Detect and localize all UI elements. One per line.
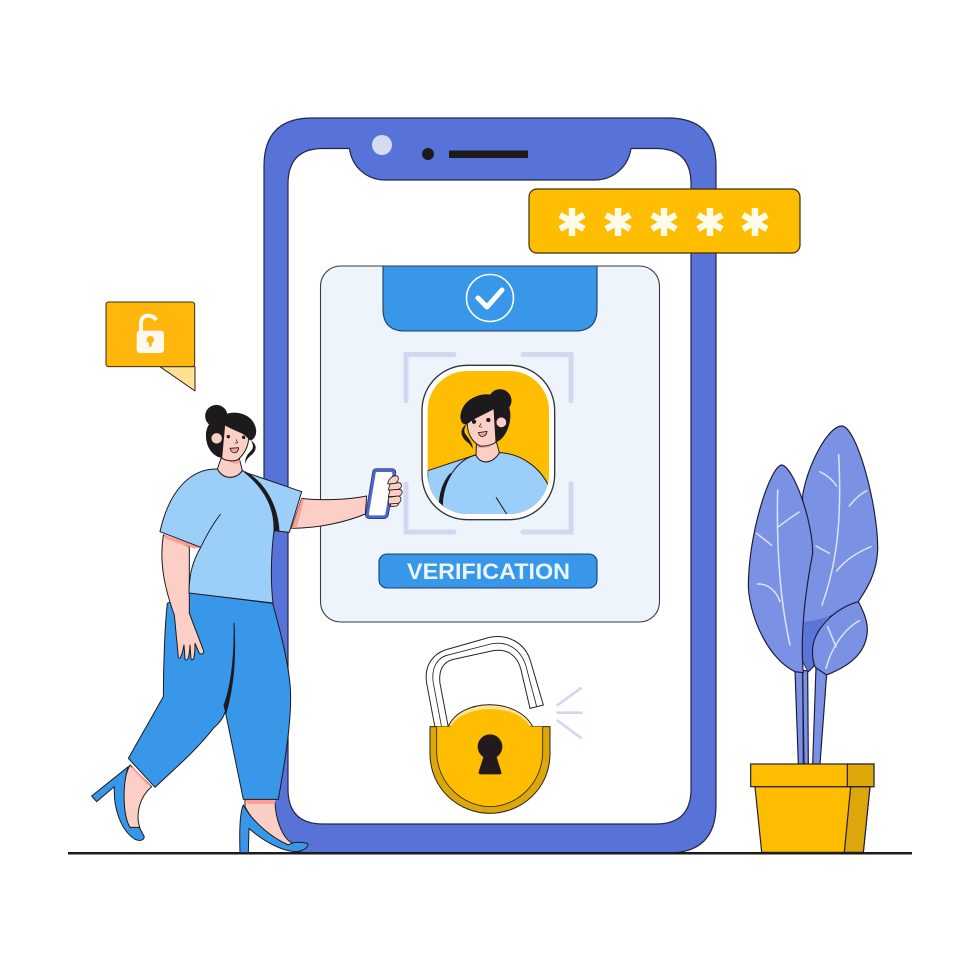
woman upper body bbox=[160, 405, 402, 603]
pot bbox=[751, 764, 874, 852]
portrait frame bbox=[422, 365, 555, 520]
nose bbox=[235, 439, 238, 443]
strap shadow bbox=[245, 472, 279, 531]
verification button: VERIFICATION bbox=[407, 559, 570, 584]
open padlock bbox=[426, 637, 581, 813]
neck bbox=[217, 455, 242, 477]
phone camera lens bbox=[372, 135, 392, 155]
back leaf bbox=[802, 426, 878, 672]
handheld phone bbox=[366, 469, 396, 519]
back sleeve bbox=[243, 472, 302, 532]
ground line bbox=[68, 852, 912, 854]
padlock keyhole bbox=[478, 734, 502, 774]
trousers bbox=[128, 593, 291, 799]
portrait woman bbox=[428, 390, 549, 520]
eyes bbox=[227, 435, 230, 438]
phone bbox=[264, 118, 716, 853]
left leaf bbox=[748, 465, 813, 673]
shirt bbox=[160, 469, 274, 603]
woman holding phone bbox=[92, 405, 402, 853]
panel header tab bbox=[383, 266, 597, 331]
left arm and hand bbox=[162, 535, 204, 660]
small leaf veins bbox=[826, 621, 859, 668]
padlock shackle bbox=[426, 637, 543, 727]
unlock sparks bbox=[558, 688, 581, 738]
check badge icon bbox=[466, 274, 514, 322]
back leaf veins bbox=[816, 455, 871, 605]
sleeve shadow bbox=[164, 534, 201, 549]
trouser crease shadow bbox=[224, 623, 235, 713]
unlock icon bbox=[137, 316, 164, 353]
verification button bbox=[379, 554, 597, 588]
verification panel bbox=[320, 266, 660, 622]
left leaf veins bbox=[757, 490, 799, 645]
back foot and shoe bbox=[123, 765, 152, 828]
face bbox=[222, 425, 249, 461]
speech bubble with unlock icon bbox=[106, 302, 195, 391]
right arm bbox=[292, 496, 367, 528]
ear bbox=[211, 433, 222, 444]
phone speaker bbox=[449, 150, 528, 158]
password asterisks bbox=[560, 208, 767, 236]
front foot and shoe bbox=[245, 800, 293, 845]
password field bbox=[529, 189, 800, 253]
woman lower body bbox=[92, 535, 308, 853]
mouth bbox=[230, 448, 239, 453]
padlock body bbox=[430, 705, 550, 813]
small leaf bbox=[812, 602, 867, 675]
hair bbox=[206, 405, 256, 464]
scan brackets bbox=[406, 354, 571, 532]
fingers bbox=[388, 476, 402, 507]
plant stems bbox=[795, 667, 827, 764]
phone front sensor bbox=[422, 148, 434, 160]
potted plant bbox=[748, 426, 878, 852]
illustration: mobile face verification bbox=[68, 117, 912, 854]
